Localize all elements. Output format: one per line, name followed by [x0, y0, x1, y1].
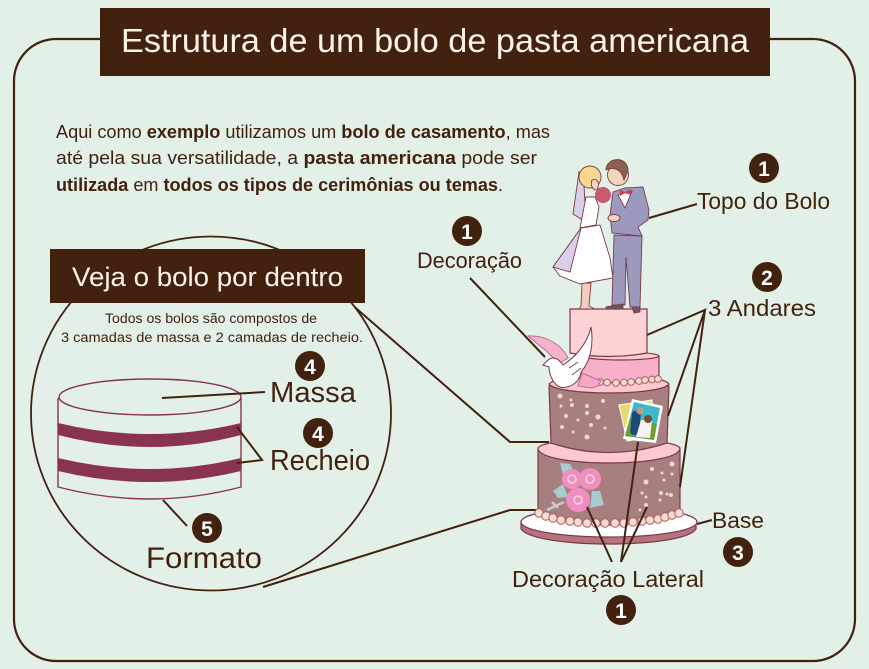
- icon: flowers: [547, 463, 604, 512]
- illustration: groom: [606, 160, 649, 313]
- inside-view heading: [50, 249, 365, 303]
- badge: 4 massa: 4: [304, 356, 316, 379]
- cake cross-section diagram: [58, 379, 241, 499]
- top tier: [570, 309, 647, 356]
- intro text block: utilizada em todos os tipos de cerimônias ou temas.: [56, 175, 503, 195]
- badge: 1 decoração: [452, 216, 482, 246]
- label: Decoração: Decoração: [417, 248, 522, 273]
- label: Decoração Lateral: Decoração Lateral: [512, 566, 704, 592]
- badge: 3 base: [723, 537, 753, 567]
- third tier: [549, 375, 669, 452]
- inside-view leader lines: [162, 392, 265, 526]
- inside-view caption: 3 camadas de massa e 2 camadas de recheio.: [61, 330, 363, 345]
- second pink tier: [580, 352, 659, 383]
- cake: [521, 309, 697, 544]
- badge: 5 formato: [192, 513, 222, 543]
- filling layer 1: [58, 423, 241, 447]
- bottom tier: [538, 439, 680, 525]
- badge: 1 decoração: 1: [461, 221, 473, 244]
- badge: 1 decoração lateral: 1: [615, 600, 627, 623]
- badge: 1 topo: 1: [758, 158, 770, 181]
- label: Topo do Bolo: Topo do Bolo: [697, 188, 830, 214]
- intro text block: até pela sua versatilidade, a pasta americana pode ser: [56, 148, 537, 168]
- badge: 1 decoração lateral: [606, 595, 636, 625]
- badge: 4 massa: [295, 351, 325, 381]
- label: Recheio: Recheio: [270, 445, 370, 477]
- inside-view caption: Todos os bolos são compostos de: [105, 311, 317, 326]
- badge: 2 andares: [752, 262, 782, 292]
- icon: dove: [528, 327, 601, 388]
- badge: 3 base: 3: [732, 542, 744, 565]
- inside-view circle: [31, 236, 391, 590]
- title: Estrutura de um bolo de pasta americana: [121, 22, 750, 59]
- intro text block: [56, 122, 550, 195]
- label: Formato: Formato: [146, 542, 262, 575]
- badge: 5 formato: 5: [201, 518, 213, 541]
- filling layer 2: [58, 458, 241, 482]
- badge: 2 andares: 2: [761, 267, 773, 290]
- icon: photo stack: [619, 399, 663, 443]
- inside-view caption: [61, 311, 363, 345]
- intro text block: Aqui como exemplo utilizamos um bolo de casamento, mas: [56, 122, 550, 142]
- sprinkle dots: [558, 394, 674, 512]
- label: Base: Base: [712, 508, 764, 533]
- badge: 4 recheio: 4: [312, 423, 324, 446]
- cake leader lines: [470, 204, 712, 562]
- cake base: [521, 507, 697, 544]
- pearls: [535, 376, 683, 527]
- label: 3 Andares: 3 Andares: [708, 295, 816, 321]
- inside-view heading: Veja o bolo por dentro: [72, 262, 343, 292]
- title: [100, 8, 770, 76]
- connector lines to inside view: [263, 303, 549, 587]
- badge: 1 topo: [749, 153, 779, 183]
- badge: 4 recheio: [303, 418, 333, 448]
- label: Massa: Massa: [270, 377, 357, 409]
- illustration: bride: [553, 166, 613, 309]
